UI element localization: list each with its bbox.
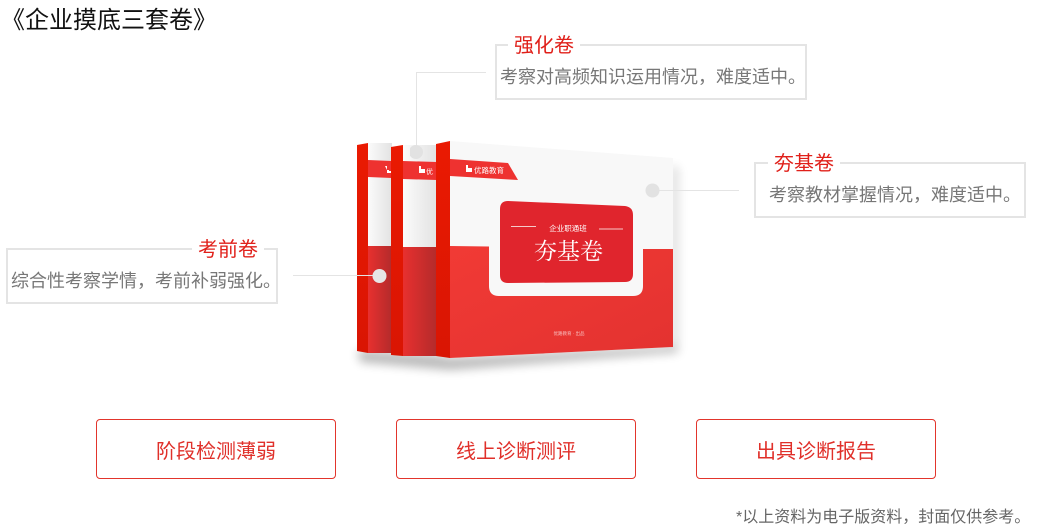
callout heading: 考前卷 [198, 239, 258, 261]
book: 强化卷: 优 [426, 167, 433, 176]
callout: 夯基卷 [754, 153, 1026, 218]
cover panel [500, 201, 633, 283]
footnote: *以上资料为电子版资料，封面仅供参考。 [736, 509, 1030, 526]
book: 考前卷 [357, 143, 392, 353]
button: 阶段检测薄弱 [96, 419, 336, 479]
callout text: 综合性考察学情，考前补弱强化。 [11, 271, 281, 291]
button: 阶段检测薄弱: 阶段检测薄弱 [156, 441, 276, 463]
book: 强化卷 [391, 145, 437, 356]
button: 出具诊断报告: 出具诊断报告 [756, 441, 876, 463]
book shadow [358, 165, 680, 370]
cover panel: 企业职通班 [549, 223, 587, 233]
button: 线上诊断测评 [396, 419, 636, 479]
callout: 强化卷 [495, 35, 807, 100]
connector: 考前卷 [293, 160, 672, 358]
title: 《企业摸底三套卷》 [1, 7, 217, 34]
book: 夯基卷 [436, 141, 673, 358]
callout: 考前卷 [6, 239, 281, 304]
callout heading: 夯基卷 [774, 153, 834, 175]
connector: 强化卷 [410, 72, 486, 159]
callout heading: 强化卷 [514, 35, 574, 57]
connector: 夯基卷 [646, 184, 739, 198]
book: 夯基卷: 优路教育 · 出品 [554, 330, 585, 337]
cover panel: 夯基卷 [534, 239, 603, 264]
cover ribbon: 优路教育 [474, 165, 504, 175]
button: 出具诊断报告 [696, 419, 936, 479]
callout text: 考察教材掌握情况，难度适中。 [769, 185, 1021, 205]
button: 线上诊断测评: 线上诊断测评 [456, 441, 576, 463]
callout text: 考察对高频知识运用情况，难度适中。 [500, 67, 806, 87]
book illustration [354, 141, 682, 376]
cover ribbon [450, 159, 518, 180]
